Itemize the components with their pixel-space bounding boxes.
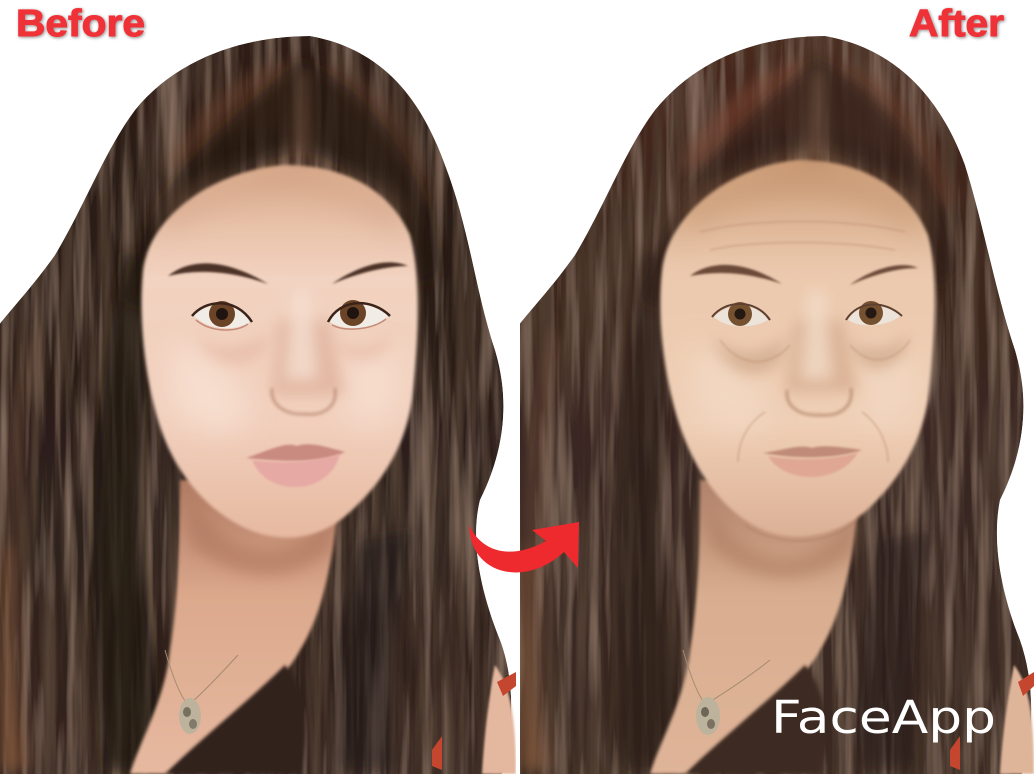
necklace: after xyxy=(683,650,770,735)
necklace: before xyxy=(165,650,238,734)
hair shadow around face: after xyxy=(640,60,955,310)
heading: After: After xyxy=(909,3,1004,45)
neck and chest: before xyxy=(130,480,516,774)
lips: before xyxy=(246,444,345,487)
heading: Before: Before xyxy=(16,3,145,45)
face: after xyxy=(660,155,935,541)
hair parting highlight: before xyxy=(290,70,312,160)
eye: before right xyxy=(328,300,390,329)
watermark: FaceApp: FaceApp xyxy=(771,691,996,744)
brows: before xyxy=(168,262,408,284)
hair: after xyxy=(515,36,1031,774)
brows: after xyxy=(690,265,918,285)
eye: after left xyxy=(712,302,770,326)
nose: before xyxy=(272,388,335,414)
hair shadow around face: before xyxy=(120,60,440,310)
photo: after portrait xyxy=(515,36,1034,774)
face: before xyxy=(141,160,418,538)
arrow: before to after xyxy=(469,522,579,572)
neck and chest: after xyxy=(650,480,1034,774)
hair parting highlight: after xyxy=(805,70,827,160)
lips: after xyxy=(763,446,862,477)
photo: before portrait xyxy=(0,36,516,774)
eye: before left xyxy=(192,301,252,330)
nose: after xyxy=(787,388,851,415)
hair: before xyxy=(0,36,511,774)
wrinkles: after xyxy=(700,222,910,541)
divider between photos xyxy=(516,0,520,774)
eye: after right xyxy=(846,301,902,325)
